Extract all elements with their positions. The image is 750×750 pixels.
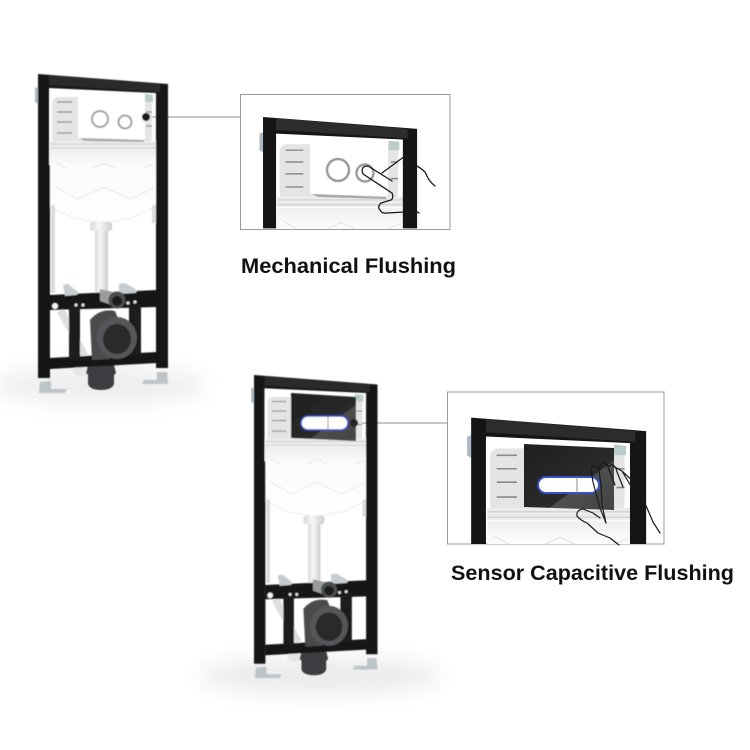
sensor flush plate [291, 393, 356, 441]
inset panel: mechanical flushing close-up [240, 94, 450, 230]
heading: mechanical flushing: Mechanical Flushing [241, 254, 456, 278]
sensor cistern frame [251, 375, 378, 678]
connector line: mechanical [146, 116, 241, 118]
icon: hand waving over sensor [577, 462, 660, 545]
icon: pressing hand [362, 156, 435, 213]
connector line: sensor [354, 422, 448, 424]
callout dot: mechanical [142, 113, 150, 121]
mechanical cistern frame [35, 74, 168, 393]
mechanical flush plate [78, 92, 145, 142]
floor shadow: upper unit [0, 365, 205, 405]
enlarged frame with plate [467, 418, 646, 544]
inset panel: sensor flushing close-up [448, 392, 664, 545]
heading: sensor capacitive flushing: Sensor Capacitive Flushing [451, 561, 734, 585]
floor shadow: lower unit [200, 656, 440, 696]
callout dot: sensor [350, 419, 358, 427]
enlarged frame with plate [259, 117, 417, 228]
